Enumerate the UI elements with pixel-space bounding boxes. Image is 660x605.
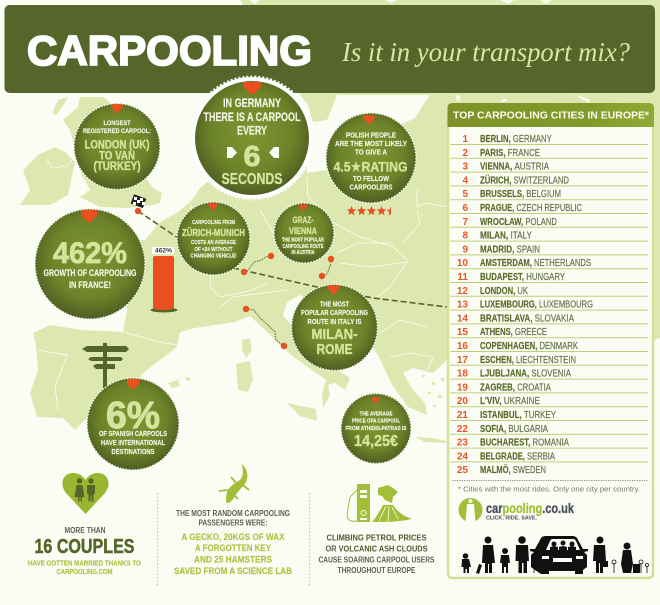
logo: carpooling.co.uk: carpooling.co.uk bbox=[486, 500, 574, 516]
city list: BUCHAREST, ROMANIA bbox=[480, 438, 569, 449]
city list: LUXEMBOURG, LUXEMBOURG bbox=[480, 300, 593, 311]
bubble: Athens-Patras price: PRICE OFA CARPOOL bbox=[352, 419, 401, 425]
bubble: Milan-Rome: MILAN- bbox=[312, 327, 358, 343]
city list: MADRID, SPAIN bbox=[480, 244, 540, 255]
bubble: Spanish carpools: 6% bbox=[106, 395, 160, 437]
bubble: Poland: POLISH PEOPLE bbox=[346, 133, 396, 140]
map of Europe bbox=[20, 0, 660, 443]
bubble: Poland: ARE THE MOST LIKELY bbox=[335, 141, 407, 148]
text: 16 couples: 16 COUPLES bbox=[34, 536, 134, 558]
bubble: Athens-Patras price bbox=[341, 394, 411, 464]
city list: MALMÖ, SWEDEN bbox=[480, 463, 546, 476]
bubble: longest carpool: REGISTERED CARPOOL: bbox=[83, 128, 151, 135]
text: random passengers bbox=[174, 509, 292, 576]
city list: 22 bbox=[457, 424, 468, 435]
route: Graz to Vienna bbox=[319, 256, 334, 279]
city list: 18 bbox=[457, 369, 468, 380]
city list: COPENHAGEN, DENMARK bbox=[480, 341, 578, 352]
city list: MILAN, ITALY bbox=[480, 231, 532, 242]
city list: PRAGUE, CZECH REPUBLIC bbox=[480, 203, 582, 214]
city list: WROCŁAW, POLAND bbox=[480, 217, 557, 228]
header banner bbox=[4, 5, 655, 93]
bubble: Zürich-Munich: OF <24 WITHOUT bbox=[194, 247, 233, 253]
text: random passengers: PASSENGERS WERE: bbox=[198, 519, 268, 528]
text: random passengers: AND 25 HAMSTERS bbox=[194, 555, 272, 565]
city list: ZÜRICH, SWITZERLAND bbox=[480, 173, 569, 186]
bubble: Graz-Vienna: IN AUSTRIA bbox=[292, 250, 315, 256]
panel heading: TOP CARPOOLING CITIES IN EUROPE* bbox=[453, 111, 649, 122]
icon: petrol pump and volcano bbox=[347, 484, 412, 522]
icon: gecko bbox=[219, 464, 249, 503]
city list: PARIS, FRANCE bbox=[480, 148, 540, 159]
bubble: Germany: EVERY bbox=[237, 126, 267, 138]
city list: 21 bbox=[457, 410, 468, 421]
text: petrol and ash: OR VOLCANIC ASH CLOUDS bbox=[326, 544, 428, 554]
city list: 15 bbox=[457, 327, 468, 338]
illustration: family and car bbox=[462, 536, 648, 574]
city list: VIENNA, AUSTRIA bbox=[480, 162, 549, 173]
bar label: 462% bbox=[155, 248, 173, 254]
city list: 16 bbox=[457, 341, 468, 352]
city list bbox=[457, 134, 593, 476]
logo: carpooling.co.uk: CLICK. RIDE. SAVE. bbox=[486, 516, 538, 522]
city list: LJUBLJANA, SLOVENIA bbox=[480, 369, 571, 380]
text: random passengers: A GECKO, 20KGS OF WAX bbox=[182, 532, 284, 542]
text: petrol and ash bbox=[318, 533, 435, 575]
bubble: Zürich-Munich: CHANGING VEHICLE! bbox=[190, 254, 237, 260]
city list: BRATISLAVA, SLOVAKIA bbox=[480, 313, 574, 324]
city list: 11 bbox=[457, 272, 468, 283]
bubble: longest carpool: (TURKEY) bbox=[94, 159, 141, 173]
city list: 25 bbox=[457, 465, 468, 476]
bubble: Poland bbox=[326, 113, 416, 203]
bar chart: 462% growth bbox=[150, 247, 178, 312]
text: random passengers: A FORGOTTEN KEY bbox=[195, 543, 271, 553]
city list: 3 bbox=[462, 162, 468, 173]
bubble: Germany: 6 bbox=[244, 141, 260, 173]
bubble: Zürich-Munich: COSTS AN AVERAGE bbox=[191, 240, 236, 246]
city list: LONDON, UK bbox=[480, 286, 528, 297]
city list: 2 bbox=[462, 148, 468, 159]
city list: ESCHEN, LIECHTENSTEIN bbox=[480, 355, 576, 366]
city list: 12 bbox=[457, 286, 468, 297]
bubble: Poland: TO GIVE A bbox=[355, 150, 387, 157]
bubble: Milan-Rome: POPULAR CARPOOLING bbox=[301, 310, 368, 317]
city list: 14 bbox=[457, 313, 468, 324]
text: 16 couples: MORE THAN bbox=[64, 526, 106, 535]
city list: 5 bbox=[462, 189, 468, 200]
bubble: growth in France: 462% bbox=[53, 237, 127, 270]
city list: BRUSSELS, BELGIUM bbox=[480, 189, 561, 200]
bubble: longest carpool: TO VAN bbox=[99, 148, 135, 162]
city list: 24 bbox=[457, 451, 468, 462]
city list: 13 bbox=[457, 300, 468, 311]
city list: 20 bbox=[457, 396, 468, 407]
bubble: Spanish carpools: OF SPANISH CARPOOLS bbox=[99, 431, 167, 438]
bubble: Zürich-Munich: ZÜRICH-MUNICH bbox=[182, 226, 245, 239]
city list: 7 bbox=[462, 217, 468, 228]
panel: top carpooling cities bbox=[448, 103, 654, 578]
icon: rating stars bbox=[347, 206, 391, 216]
flag and London pin bbox=[131, 194, 146, 214]
icon: couple in heart bbox=[62, 473, 109, 514]
bubble: Milan-Rome: THE MOST bbox=[320, 302, 350, 309]
bubble: Milan-Rome bbox=[292, 284, 378, 370]
bubble: Graz-Vienna: VIENNA bbox=[289, 226, 317, 236]
bubble: Poland: TO FELLOW bbox=[353, 176, 389, 183]
bubble: Spanish carpools bbox=[87, 378, 179, 470]
bubble: Poland: CARPOOLERS bbox=[350, 185, 393, 192]
footnote: * Cities with the most rides. Only one city per country. bbox=[458, 486, 640, 494]
icon: signpost bbox=[82, 343, 129, 388]
bubble: Athens-Patras price: THE AVERAGE bbox=[360, 412, 393, 418]
bubble: Spanish carpools: HAVE INTERNATIONAL bbox=[101, 440, 166, 447]
bubble: longest carpool: LONDON (UK) bbox=[84, 138, 150, 152]
bubble: Graz-Vienna: GRAZ- bbox=[292, 215, 314, 225]
city list: ATHENS, GREECE bbox=[480, 327, 547, 338]
bubble: longest carpool: LONGEST bbox=[104, 120, 131, 127]
logo: carpooling.co.uk bbox=[458, 498, 574, 522]
icon: arrows around 6 bbox=[227, 147, 279, 158]
city list: AMSTERDAM, NETHERLANDS bbox=[480, 258, 591, 269]
bubble: growth in France: IN FRANCE! bbox=[69, 280, 111, 291]
bubble: Zürich-Munich: CARPOOLING FROM bbox=[192, 220, 235, 226]
bubble: growth in France: GROWTH OF CARPOOLING bbox=[44, 268, 136, 279]
city list: SOFIA, BULGARIA bbox=[480, 424, 548, 435]
bubble: Athens-Patras price: FROM ATHENS-PATRAS IS bbox=[346, 426, 407, 432]
bubble: Germany: THERE IS A CARPOOL bbox=[204, 112, 300, 124]
bubble: Graz-Vienna: THE MOST POPULAR bbox=[282, 238, 324, 244]
bubble: Athens-Patras price: 14,25€ bbox=[354, 433, 398, 450]
city list: BELGRADE, SERBIA bbox=[480, 451, 555, 462]
city list: BUDAPEST, HUNGARY bbox=[480, 272, 565, 283]
text: random passengers: THE MOST RANDOM CARPOOLING bbox=[176, 509, 290, 518]
city list: ISTANBUL, TURKEY bbox=[480, 410, 556, 421]
bubble: Germany: IN GERMANY bbox=[223, 98, 281, 110]
city list: 4 bbox=[462, 175, 468, 186]
panel heading bbox=[448, 103, 654, 127]
bubble: Milan-Rome: ROME bbox=[316, 342, 353, 358]
text: petrol and ash: CAUSE SOARING CARPOOL USERS bbox=[318, 556, 435, 565]
text: petrol and ash: THROUGHOUT EUROPE bbox=[338, 566, 416, 575]
text: 16 couples: HAVE GOTTEN MARRIED THANKS TO bbox=[28, 559, 141, 568]
bubble: growth in France bbox=[35, 209, 145, 319]
subtitle: Is it in your transport mix? bbox=[341, 37, 630, 67]
title: CARPOOLING bbox=[27, 27, 312, 74]
bubble: Milan-Rome: ROUTE IN ITALY IS bbox=[308, 319, 362, 326]
bubble: Spanish carpools: DESTINATIONS bbox=[112, 449, 155, 456]
text: petrol and ash: CLIMBING PETROL PRICES bbox=[326, 533, 427, 543]
city list: ZAGREB, CROATIA bbox=[480, 382, 551, 393]
city list: 8 bbox=[462, 231, 468, 242]
bubble: Graz-Vienna bbox=[274, 203, 334, 263]
text: random passengers: SAVED FROM A SCIENCE LAB bbox=[174, 566, 292, 576]
city list: L'VIV, UKRAINE bbox=[480, 396, 540, 407]
city list: 1 bbox=[462, 134, 468, 145]
text: 16 couples: CARPOOLING.COM bbox=[56, 567, 112, 576]
city list: BERLIN, GERMANY bbox=[480, 134, 552, 145]
text: 16 couples bbox=[28, 526, 141, 576]
bubble: Graz-Vienna: CARPOOLING ROUTE bbox=[282, 244, 324, 250]
route dashed line: London to Van bbox=[138, 211, 447, 307]
city list: 10 bbox=[457, 258, 468, 269]
bubble: Poland: 4.5★RATING bbox=[334, 159, 408, 175]
route: Zürich to Munich bbox=[241, 253, 274, 275]
city list: 19 bbox=[457, 382, 468, 393]
city list: 9 bbox=[462, 244, 468, 255]
route: Milan to Rome bbox=[243, 306, 287, 349]
city list: 23 bbox=[457, 438, 468, 449]
bubble: Germany bbox=[190, 76, 314, 200]
city list: 6 bbox=[462, 203, 468, 214]
city list: 17 bbox=[457, 355, 468, 366]
bubble: Germany: SECONDS bbox=[222, 171, 283, 188]
bubble: Zürich-Munich bbox=[177, 202, 250, 275]
bubble: longest carpool bbox=[74, 104, 160, 190]
